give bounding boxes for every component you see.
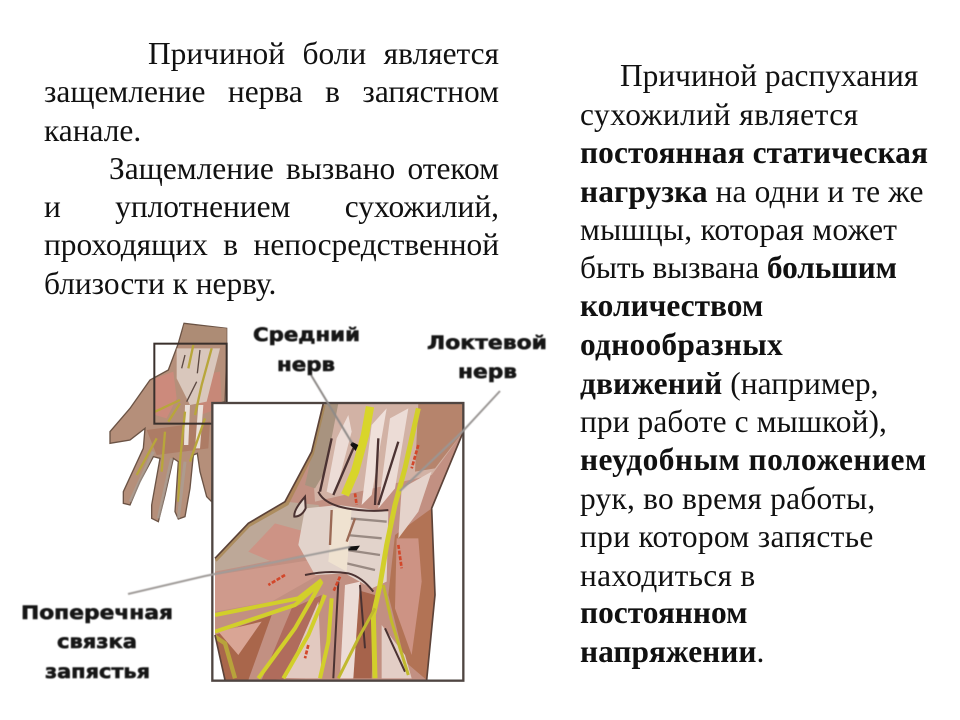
label: median nerve: нерв [277, 354, 335, 376]
text block: cause of tendon swelling: находиться в [580, 558, 755, 593]
panel frame [212, 403, 463, 681]
text block: cause of tendon swelling: количеством [580, 288, 763, 323]
tendons above ligament [327, 415, 352, 495]
text block: cause of tendon swelling: рук, во время работы, [580, 481, 875, 516]
text block: cause of tendon swelling: неудобным положением [580, 442, 927, 477]
text block: cause of pain: Причиной боли является [148, 36, 499, 71]
leader lines [128, 375, 500, 594]
text block: cause of pain [44, 36, 499, 301]
text block: cause of pain: близости к нерву. [44, 266, 276, 301]
label: transverse carpal ligament: связка [57, 631, 137, 653]
text block: cause of tendon swelling: сухожилий является [580, 97, 859, 132]
text block: cause of pain: проходящих в непосредственной [44, 227, 499, 262]
locator square [154, 344, 227, 424]
label: transverse carpal ligament: запястья [45, 661, 150, 683]
text block: cause of tendon swelling: при работе с мышкой), [580, 404, 887, 439]
label: ulnar nerve: нерв [458, 361, 517, 383]
text block: cause of tendon swelling: Причиной распухания [620, 58, 918, 93]
carpal ligament [298, 505, 388, 588]
silhouette outline [215, 403, 463, 680]
text block: cause of tendon swelling: при котором запястье [580, 519, 874, 554]
dark pointer marks [348, 442, 360, 550]
text block: cause of tendon swelling: мышцы, которая может [580, 212, 897, 247]
yellow median nerve [345, 407, 370, 495]
forearm top [312, 403, 463, 502]
label: median nerve: Средний [253, 324, 360, 346]
leader: ulnar nerve [400, 391, 500, 491]
text block: cause of tendon swelling: нагрузка на одни и те же [580, 174, 924, 209]
label: ulnar nerve: Локтевой [427, 332, 547, 354]
text block: cause of tendon swelling: постоянном [580, 595, 747, 630]
text block: cause of pain: защемление нерва в запястном [44, 74, 499, 109]
label: median nerve [253, 324, 360, 376]
hand silhouette [110, 323, 227, 522]
text block: cause of tendon swelling: напряжении. [580, 634, 764, 669]
leader: median nerve [311, 375, 352, 443]
illustration: hand overview [110, 323, 227, 522]
text block: cause of pain: канале. [44, 113, 141, 148]
lower palm muscle [215, 615, 272, 680]
text block: cause of tendon swelling: однообразных [580, 327, 783, 362]
text block: cause of tendon swelling: движений (например, [580, 366, 879, 401]
thumb-side edge band [215, 405, 323, 560]
red vessels [268, 445, 418, 658]
leader: transverse carpal ligament [128, 547, 350, 594]
illustration: wrist detail panel [205, 395, 472, 685]
yellow ulnar nerve [373, 408, 418, 678]
text block: cause of tendon swelling: быть вызвана большим [580, 250, 897, 285]
muscle base [215, 434, 462, 680]
thumb-side eminence [215, 502, 320, 572]
text block: cause of pain: и уплотнением сухожилий, [44, 189, 499, 224]
right muscle [388, 508, 437, 680]
label: ulnar nerve [427, 332, 547, 383]
lower tendons [340, 582, 360, 678]
label: transverse carpal ligament [21, 602, 173, 683]
label: transverse carpal ligament: Поперечная [21, 602, 173, 624]
text block: cause of tendon swelling: постоянная статическая [580, 135, 928, 170]
text block: cause of tendon swelling [580, 58, 928, 669]
text block: cause of pain: Защемление вызвано отеком [109, 151, 499, 186]
